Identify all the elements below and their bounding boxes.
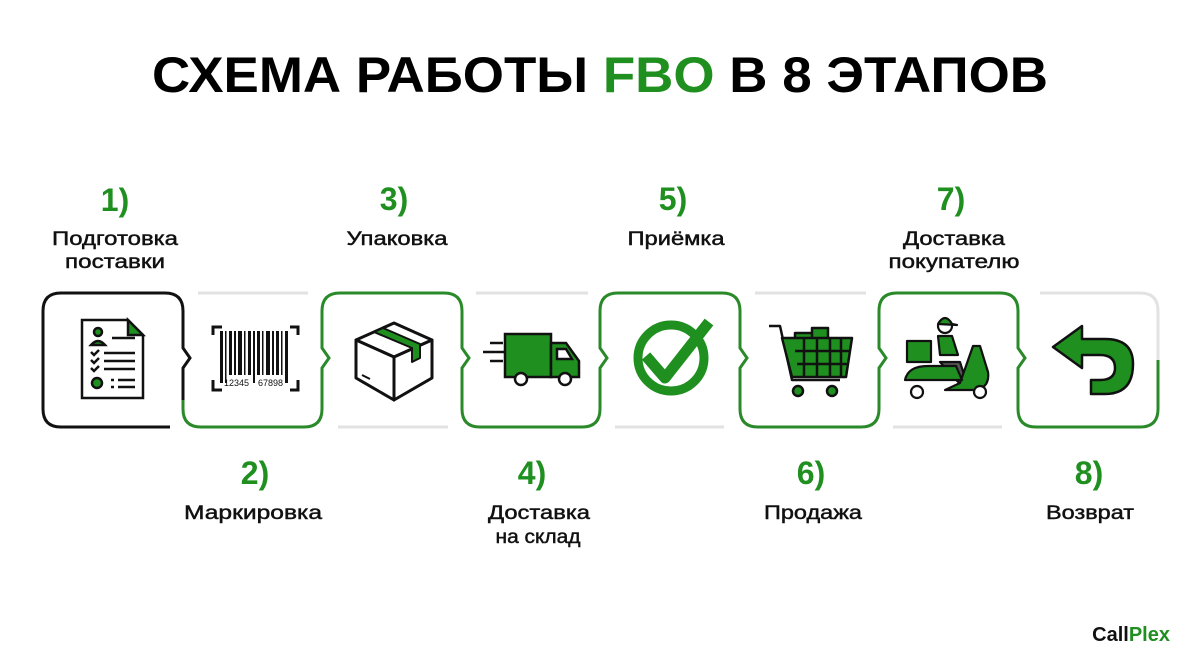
icon: barcode: 67898 xyxy=(258,378,283,388)
step 5 label xyxy=(628,181,725,250)
logo: CallPlex: CallPlex xyxy=(1092,624,1170,646)
serpentine frame: boxes 2-8 xyxy=(183,293,1158,427)
icon: barcode xyxy=(213,327,298,390)
step 1 label: 1) xyxy=(101,182,129,218)
icon: box xyxy=(356,323,432,400)
step 6 label: 6) xyxy=(797,455,825,491)
step 4 label: на склад xyxy=(496,527,580,548)
step 8 label: Возврат xyxy=(1046,503,1134,524)
step 1 label: Подготовка xyxy=(52,229,179,250)
step 8 label: 8) xyxy=(1075,455,1103,491)
step 1 label: поставки xyxy=(65,252,165,273)
step 3 label xyxy=(346,181,448,250)
step 2 label: 2) xyxy=(241,455,269,491)
grey guide lines xyxy=(198,293,1158,427)
step 5 label: 5) xyxy=(659,181,687,217)
step 2 label: Маркировка xyxy=(184,503,323,524)
step 6 label: Продажа xyxy=(764,503,863,524)
step 3 label: Упаковка xyxy=(346,229,448,250)
step 5 label: Приёмка xyxy=(628,229,725,250)
step 4 label xyxy=(488,455,591,548)
step 7 label: 7) xyxy=(937,181,965,217)
step 6 label xyxy=(764,455,863,524)
step 7 label xyxy=(888,181,1020,273)
step 7 label: покупателю xyxy=(888,252,1020,273)
serpentine frame: box 1 xyxy=(43,293,190,427)
title: СХЕМА РАБОТЫ FBO В 8 ЭТАПОВ xyxy=(152,47,1048,103)
icon: return arrow xyxy=(1053,326,1133,394)
icon: check circle xyxy=(638,322,709,391)
icon: barcode: 12345 xyxy=(224,378,249,388)
step 1 label xyxy=(52,182,179,273)
icon: courier on scooter xyxy=(905,318,988,398)
icon: delivery truck xyxy=(483,334,579,385)
icon: checklist document xyxy=(82,320,143,398)
step 3 label: 3) xyxy=(380,181,408,217)
step 4 label: Доставка xyxy=(488,503,591,524)
step 7 label: Доставка xyxy=(903,229,1006,250)
icon: shopping cart xyxy=(769,326,852,396)
step 4 label: 4) xyxy=(518,455,546,491)
step 2 label xyxy=(184,455,323,524)
step 8 label xyxy=(1046,455,1134,524)
